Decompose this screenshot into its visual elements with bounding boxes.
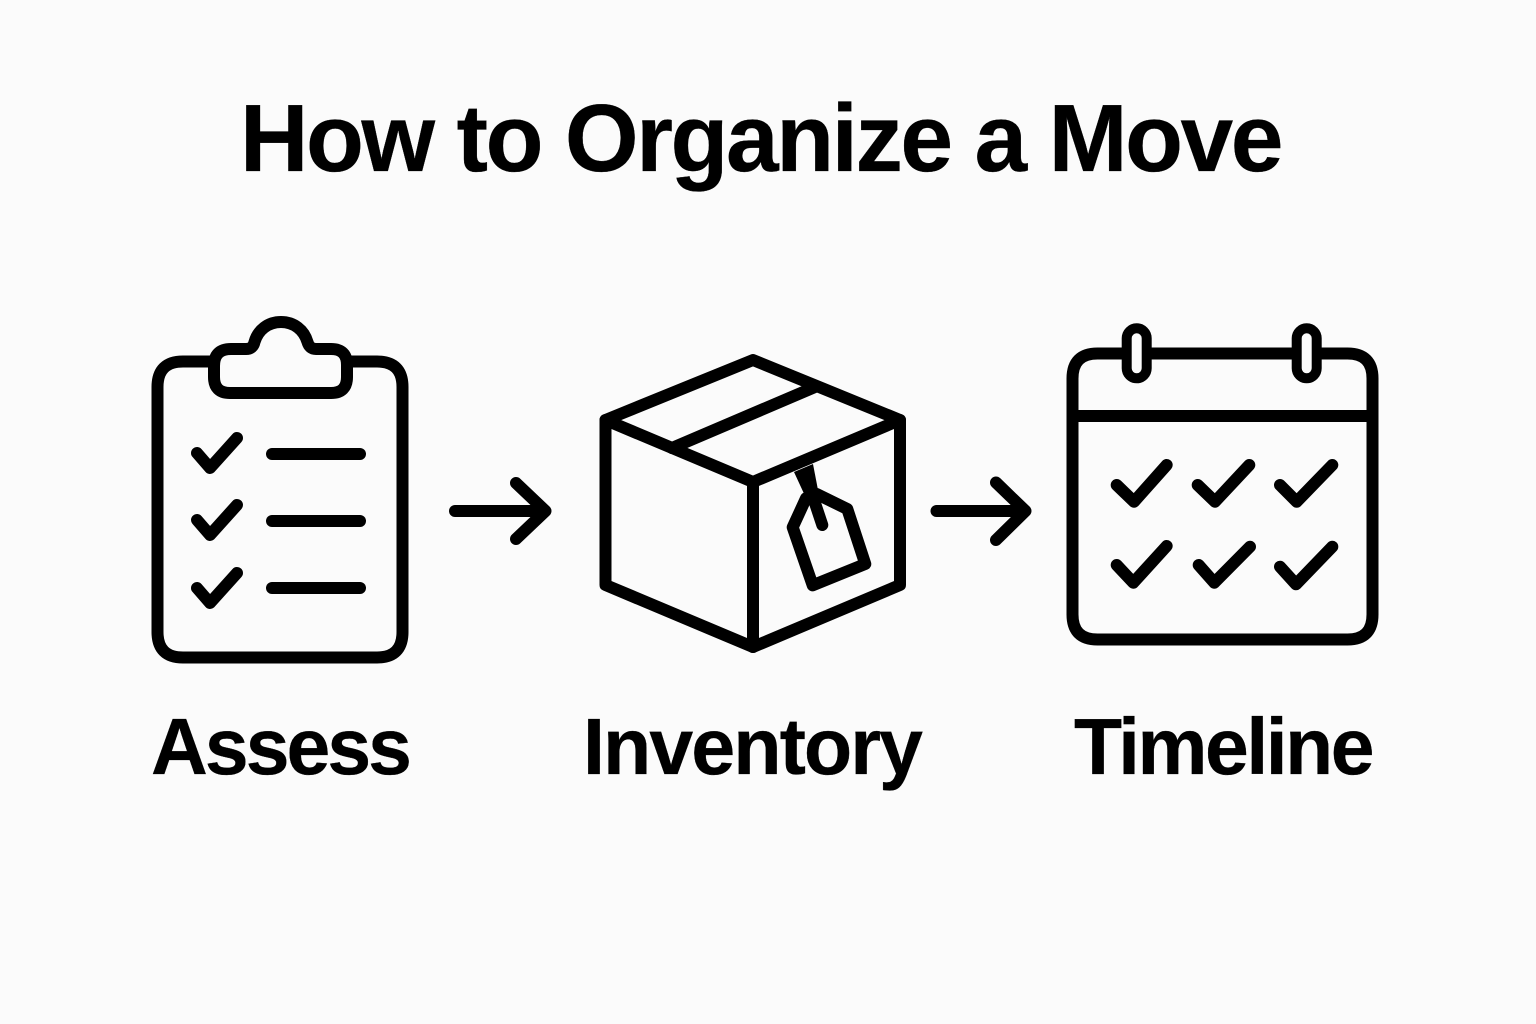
- label: Assess: Assess: [151, 702, 409, 791]
- title: How to Organize a Move: [240, 85, 1281, 192]
- label: Timeline: Timeline: [1074, 702, 1372, 791]
- arrow: assess to inventory: [455, 483, 546, 539]
- icon: calendar: [1072, 328, 1372, 640]
- label: Inventory: Inventory: [583, 702, 923, 791]
- icon: box with tag: [606, 360, 900, 647]
- icon: clipboard: [158, 322, 402, 658]
- arrow: inventory to timeline: [936, 482, 1026, 540]
